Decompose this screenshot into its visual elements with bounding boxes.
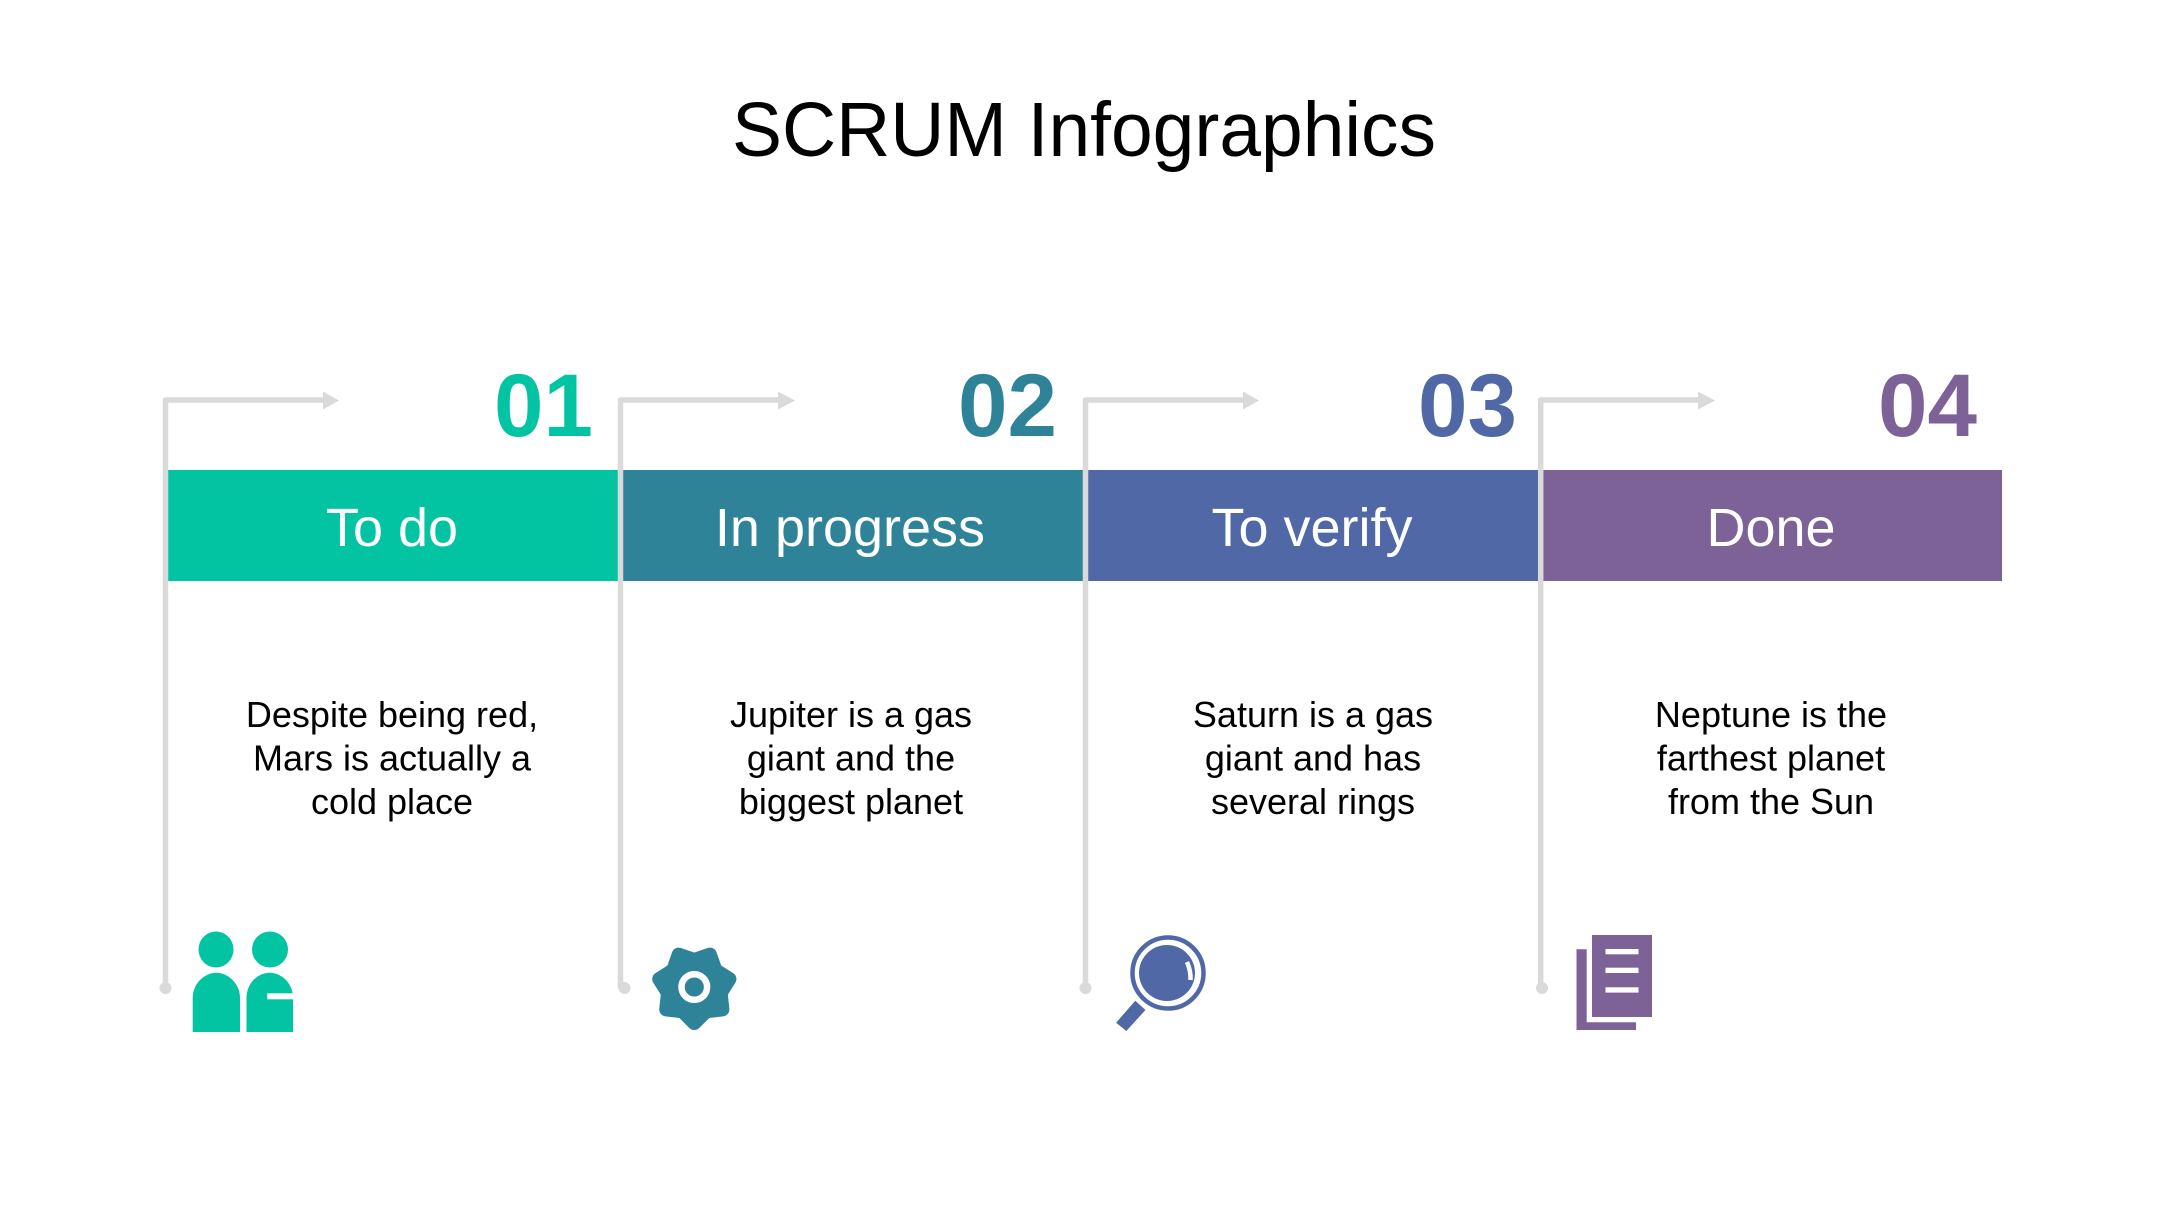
number 03: 03 (1418, 355, 1517, 455)
description 4: Neptune is the (1655, 694, 1887, 735)
number 01: 01 (494, 355, 593, 455)
band: done (1540, 470, 2002, 581)
description 2: Jupiter is a gas (730, 694, 972, 735)
description 1: Mars is actually a (253, 738, 532, 778)
description 1: cold place (311, 781, 473, 822)
icon: people (193, 932, 293, 1032)
panel: in progress (618, 355, 1085, 1023)
title: SCRUM Infographics (732, 87, 1436, 173)
description 1: Despite being red, (246, 694, 538, 735)
description 3: several rings (1211, 781, 1415, 822)
band: to do: To do (326, 498, 458, 558)
description 2: biggest planet (739, 781, 963, 822)
description 2: giant and the (747, 738, 955, 778)
arrow connector 1 (160, 392, 339, 994)
icon: magnifier (1116, 938, 1204, 1031)
arrow connector 3 (1080, 392, 1259, 994)
number 02: 02 (958, 355, 1057, 455)
panel: to do (160, 355, 620, 1032)
panel: done (1536, 355, 2002, 1030)
panel: to verify (1080, 355, 1540, 1031)
band: in progress: In progress (715, 498, 985, 558)
band: in progress (620, 470, 1085, 581)
description 3: giant and has (1205, 738, 1421, 778)
icon: documents (1576, 935, 1652, 1030)
description 4: farthest planet (1657, 738, 1885, 778)
band: to do (166, 470, 620, 581)
arrow connector 2 (618, 392, 795, 994)
number 04: 04 (1878, 355, 1977, 455)
description 4: from the Sun (1668, 781, 1874, 822)
band: to verify (1085, 470, 1540, 581)
icon: gear (659, 952, 729, 1023)
band: to verify: To verify (1211, 498, 1413, 558)
arrow connector 4 (1536, 392, 1715, 994)
description 3: Saturn is a gas (1193, 694, 1433, 735)
band: done: Done (1706, 498, 1836, 558)
